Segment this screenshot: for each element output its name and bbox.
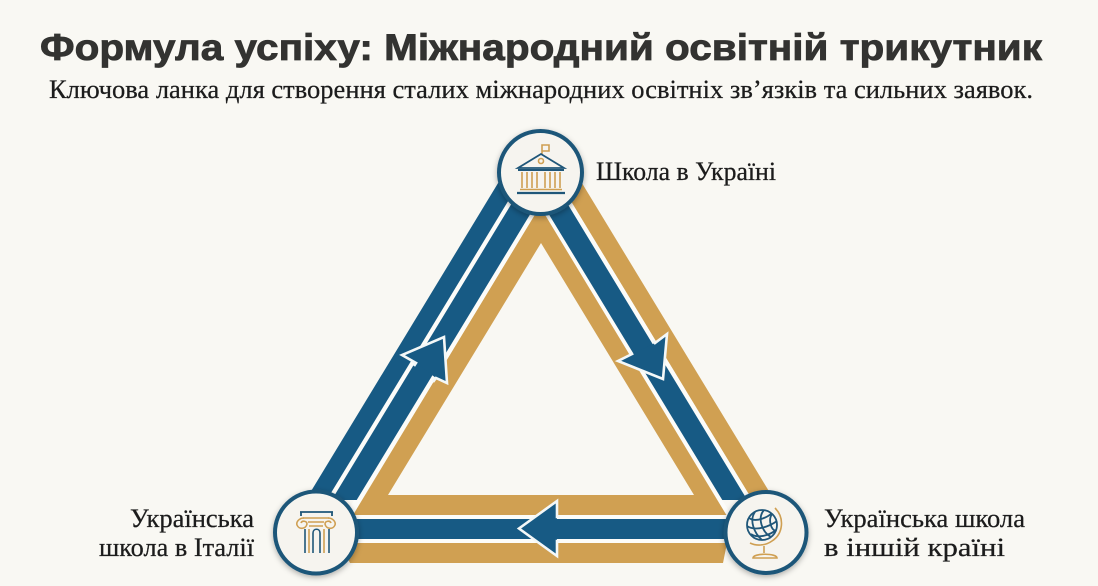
title: Формула успіху: Міжнародний освітній трикутник	[40, 27, 1043, 68]
label: Ukrainian school in Italy: Українська	[130, 504, 254, 533]
arrow: down right side	[618, 334, 667, 379]
node: Ukrainian school in Italy	[275, 492, 357, 574]
label: Ukrainian school in another country	[824, 504, 1025, 562]
gold outer right band	[552, 170, 774, 500]
label: Ukrainian school in Italy: школа в Італії	[99, 533, 255, 562]
arrow: up left side	[402, 337, 447, 383]
label: Ukrainian school in another country: в іншій країні	[824, 533, 1005, 562]
blue bottom band	[340, 519, 740, 539]
subtitle: Ключова ланка для створення сталих міжнародних освітніх зв’язків та сильних заявок.	[49, 75, 1033, 104]
label: Ukrainian school in another country: Українська школа	[824, 504, 1025, 533]
label: school in Ukraine: Школа в Україні	[596, 157, 776, 186]
arrow: left along bottom	[519, 501, 560, 556]
blue left inner band	[332, 170, 557, 500]
triangle diagram	[306, 170, 774, 563]
light separator stripes	[327, 170, 752, 543]
node: school in Ukraine	[499, 131, 582, 214]
icon: globe	[747, 508, 781, 558]
blue left outer band	[306, 170, 527, 500]
gold inner triangle frame	[353, 206, 727, 515]
icon: column	[297, 512, 335, 553]
blue right band	[522, 170, 747, 500]
gold lower bottom band	[340, 543, 727, 563]
icon: school building	[517, 145, 565, 193]
node: Ukrainian school in another country	[726, 492, 806, 573]
label: Ukrainian school in Italy	[99, 504, 255, 562]
